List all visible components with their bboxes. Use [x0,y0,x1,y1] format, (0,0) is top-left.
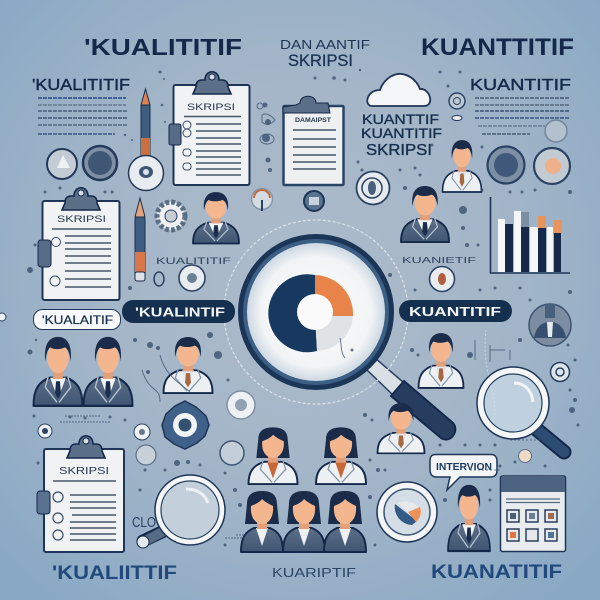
text block: kuantitatif skripsi: SKRIPSI [366,142,432,159]
clipboard: second skripsi: DAMAIPST [295,117,331,124]
magnifier: right [477,367,564,452]
icon: ring badges lower left [0,313,255,465]
people: two suits [34,337,132,406]
text block: kuantitatif skripsi: KUANTTIF [362,112,439,127]
panel: kuantitatif summary: KUANTITIF [470,77,571,94]
person: interviewee [448,485,490,551]
clipboard: top skripsi [169,72,250,185]
title: bottom kuantitatif: KUANATITIF [431,561,562,583]
clipboard: bottom skripsi [37,436,124,552]
people: three women suits [241,491,366,552]
icon: small gear badge [304,191,324,211]
icon: small rings right top [449,93,567,142]
title: kuantitatif: KUANTTITIF [421,34,574,61]
label: clo: CLO [132,514,156,531]
icon: round badges right [356,146,570,204]
chart: round pie badge [377,482,437,542]
icon: ring badge [128,156,164,190]
scattered data marks [27,69,580,547]
icon: gear [157,202,185,230]
pill: kuantitatif dark: KUANTITIF [409,304,501,319]
panel: kualitatif summary [32,77,130,134]
person: suit left [193,192,239,243]
calendar panel [500,476,566,552]
pill: kualitatif white [34,310,120,330]
person: woman left [248,427,298,484]
title: center subtitle [280,38,370,70]
icon: pencil 2 [135,198,145,281]
magnifier: lower left [137,475,225,548]
scattered line marks [60,103,540,538]
clipboard: top skripsi: SKRIPSI [187,102,235,113]
callout: interview: INTERVION [436,462,492,473]
icon: pencil 1 [141,89,150,155]
person: coat mid [378,403,424,453]
clipboard: bottom skripsi: SKRIPSI [59,466,109,477]
title: center subtitle: SKRIPSI [288,52,353,70]
title: bottom kualitatif: 'KUALIITTIF [52,563,177,584]
callout: interview [430,454,497,490]
person: coat top right [442,140,482,192]
person: coat left [164,337,212,393]
icon: gear center [162,401,209,449]
panel: kuantitatif summary [470,77,571,134]
icon: small badge near person [252,188,272,211]
title: bottom center: KUARIPTIF [272,565,356,580]
pill: kualitatif white: 'KUALAITIF [42,315,113,327]
chart: pie [268,274,353,352]
label: kuantitatif small: KUANIETIF [402,255,476,265]
icon: small badges right [518,362,570,462]
person: woman right [316,427,366,484]
person: coat right upper [418,333,464,388]
icon: round badges [47,146,117,180]
magnifier: main [224,220,455,440]
icon: cloud [367,74,430,106]
panel: kualitatif summary: 'KUALITITIF [32,77,130,94]
title: kualitatif: 'KUALITITIF [84,34,242,60]
text block: kuantitatif skripsi: KUANTITIF [361,126,442,141]
label: kualitatif small: KUALITITIF [156,256,231,267]
title: center subtitle: DAN AANTIF [280,38,370,52]
person: suit center right [401,186,449,242]
pill: kuantitatif dark [399,300,512,322]
text block: kuantitatif skripsi [361,112,442,159]
icon: suit medallion [529,304,571,346]
bar chart [490,197,570,273]
clipboard: left skripsi [38,188,120,300]
icon: ring badge lower [430,266,454,292]
pill: kualitatif dark [122,300,235,323]
clipboard: left skripsi: SKRIPSI [57,214,106,224]
pill: kualitatif dark: 'KUALINTIF [135,304,225,320]
icon: small badges under label [154,265,205,291]
clipboard: second skripsi [283,96,344,185]
